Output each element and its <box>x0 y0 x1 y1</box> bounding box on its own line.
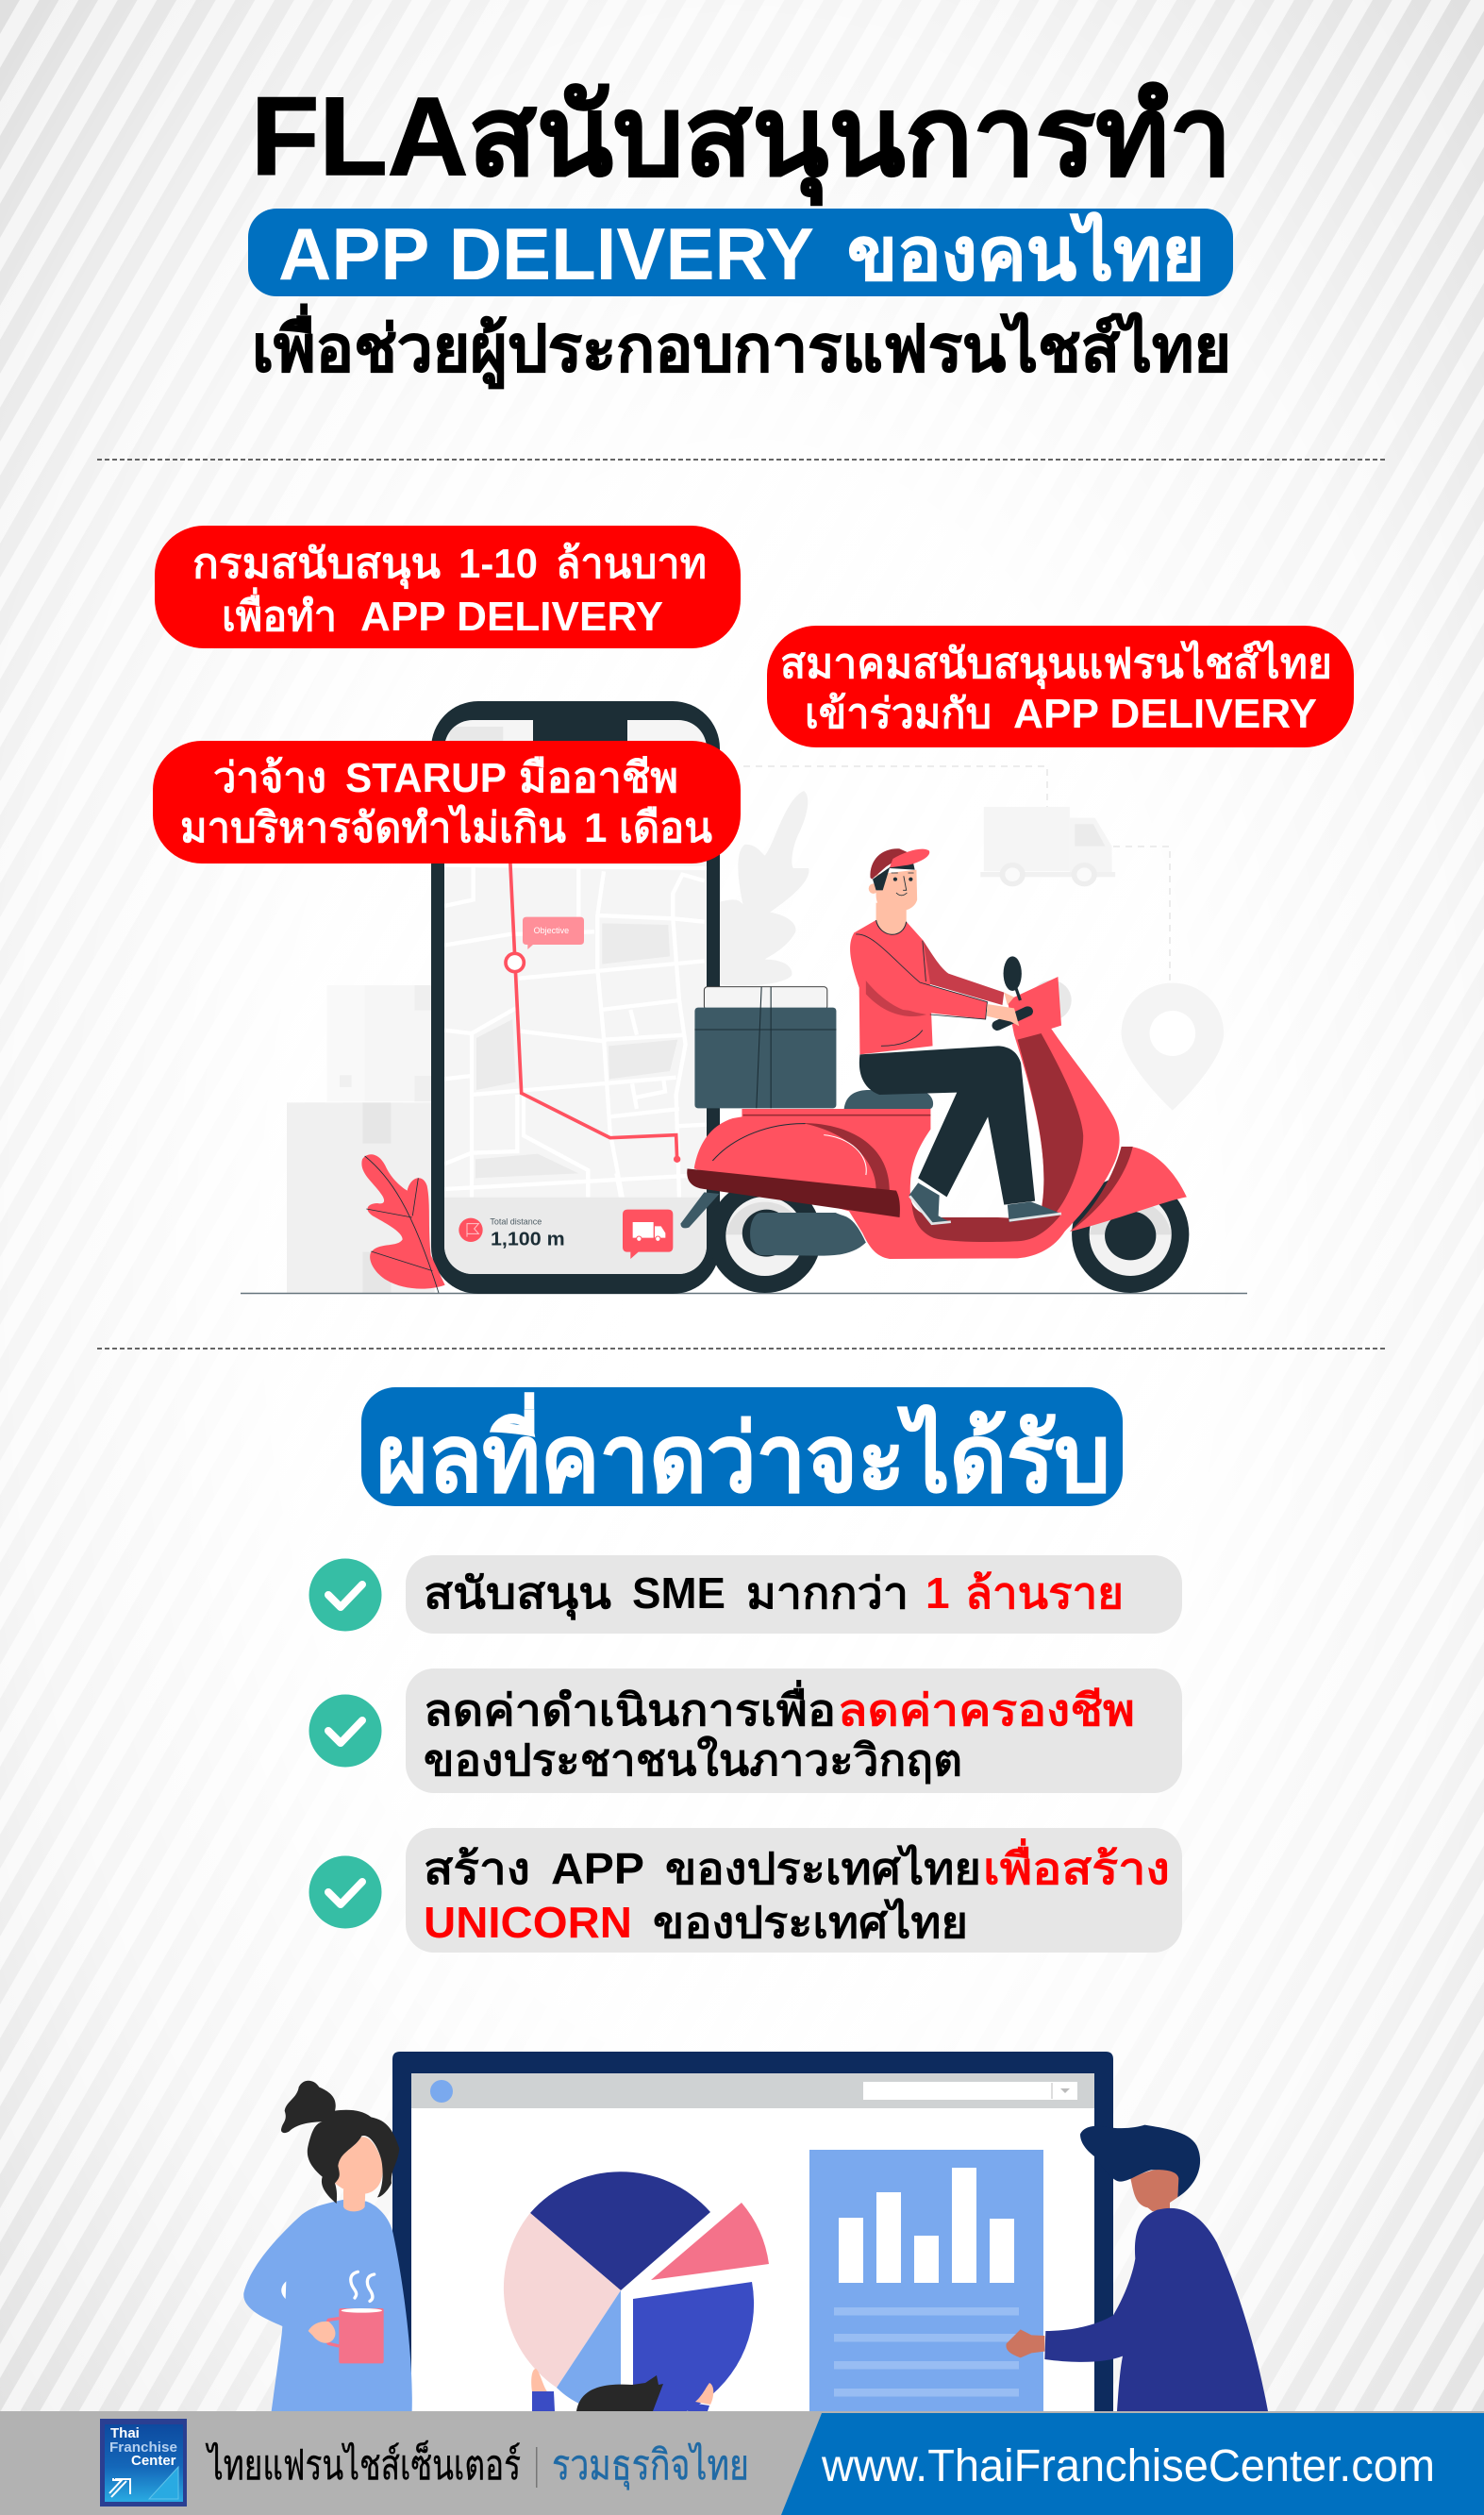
objective bubble <box>523 917 584 949</box>
footer logo <box>100 2419 187 2507</box>
phone with map <box>361 701 720 1294</box>
scooter body <box>687 977 1187 1259</box>
result pill 2 <box>406 1668 1182 1793</box>
phone speaker notch <box>533 713 627 750</box>
small person behind pie <box>531 2369 713 2411</box>
title line 3: เพื่อช่วยผู้ประกอบการแฟรนไชส์ไทย <box>252 303 1231 390</box>
result pill 1: สนับสนุน <box>424 1568 612 1620</box>
callout: department support: 1-10 <box>459 541 538 587</box>
result pill 2: ของประชาชนในภาวะวิกฤต <box>424 1735 962 1785</box>
result pill 2: ลดค่าดำเนินการเพื่อ <box>424 1680 836 1735</box>
title pill: app delivery: ของคนไทย <box>847 211 1205 295</box>
delivery illustration <box>241 701 1247 1294</box>
mirror and handlebar <box>997 956 1027 1026</box>
result pill 3: เพื่อสร้าง <box>983 1838 1170 1893</box>
pie chart <box>504 2171 769 2411</box>
result 3 <box>309 1828 1182 1953</box>
check icon 2 <box>309 1695 381 1767</box>
red leaf <box>361 1154 445 1293</box>
dashboard illustration <box>243 2052 1268 2411</box>
total distance <box>459 1216 565 1249</box>
callout: association support: เข้าร่วมกับ <box>805 691 992 737</box>
callout: hire startup: เดือน <box>619 805 712 851</box>
objective bubble: Objective <box>534 926 569 935</box>
title pill: app delivery <box>248 209 1233 296</box>
callout: department support: กรมสนับสนุน <box>192 541 441 590</box>
footer logo: Thai <box>110 2425 140 2441</box>
result pill 2: ลดค่าครองชีพ <box>838 1685 1135 1735</box>
result pill 1 <box>406 1555 1182 1634</box>
title pill: app delivery: APP DELIVERY <box>278 212 814 295</box>
result pill 1: 1 <box>925 1568 950 1618</box>
result pill 1: ล้านราย <box>965 1568 1124 1618</box>
truck bubble <box>623 1210 673 1259</box>
result pill 3: UNICORN <box>424 1898 632 1947</box>
footer brand text: รวมธุรกิจไทย <box>552 2441 749 2490</box>
total distance: 1,100 m <box>491 1229 565 1249</box>
result pill 3: ของประเทศไทย <box>653 1898 968 1947</box>
callout: association support <box>767 626 1354 747</box>
title line 1: FLAสนับสนุนการทำ <box>251 75 1232 206</box>
result 1 <box>309 1555 1182 1634</box>
footer brand text: ไทยแฟรนไชส์เซ็นเตอร์ <box>206 2440 521 2489</box>
faint background scene <box>287 766 1224 1293</box>
check icon 1 <box>309 1559 381 1631</box>
man pointing <box>1006 2125 1268 2411</box>
result pill 3 <box>406 1828 1182 1953</box>
rear wheel <box>709 1180 822 1293</box>
stand <box>680 1192 719 1228</box>
exhaust <box>750 1213 866 1256</box>
total distance: Total distance <box>490 1216 542 1226</box>
callout: association support: APP DELIVERY <box>1013 691 1317 737</box>
result pill 3: ของประเทศไทย <box>665 1844 981 1893</box>
woman with mug <box>243 2081 412 2411</box>
callout: department support: APP DELIVERY <box>360 594 663 640</box>
report panel with bars <box>809 2150 1043 2411</box>
result pill 3: สร้าง <box>424 1844 530 1893</box>
footer bar <box>0 2411 1484 2515</box>
footer logo: Franchise <box>109 2440 177 2456</box>
result 2 <box>309 1668 1182 1793</box>
result pill 3: APP <box>551 1844 644 1893</box>
result pill 1: มากกว่า <box>746 1568 909 1618</box>
callout: hire startup: 1 <box>584 805 607 851</box>
delivery box <box>694 987 836 1108</box>
callout: hire startup: STARUP <box>345 755 507 801</box>
front wheel <box>1072 1176 1189 1293</box>
check icon 3 <box>309 1855 381 1929</box>
callout: hire startup: มืออาชีพ <box>519 755 678 801</box>
callout: department support <box>155 526 741 648</box>
callout: association support: สมาคมสนับสนุนแฟรนไชส์ไทย <box>780 639 1332 690</box>
monitor <box>392 2052 1113 2411</box>
title <box>248 75 1233 390</box>
footer website ribbon: www.ThaiFranchiseCenter.com <box>821 2441 1435 2491</box>
footer website ribbon <box>781 2413 1484 2515</box>
callout: hire startup: มาบริหารจัดทำไม่เกิน <box>180 803 566 851</box>
callout: department support: เพื่อทำ <box>222 587 337 640</box>
rider <box>850 848 1061 1224</box>
scooter and rider <box>680 848 1189 1293</box>
route line <box>506 859 677 1159</box>
callout: department support: ล้านบาท <box>556 541 707 587</box>
ground line <box>241 1293 1247 1295</box>
heading: expected results: ผลที่คาดว่าจะได้รับ <box>376 1392 1110 1512</box>
seat <box>844 1090 933 1109</box>
footer logo: Center <box>131 2453 176 2469</box>
callout: hire startup: ว่าจ้าง <box>213 755 326 801</box>
callout: hire startup <box>153 741 741 863</box>
result pill 1: SME <box>632 1568 725 1618</box>
